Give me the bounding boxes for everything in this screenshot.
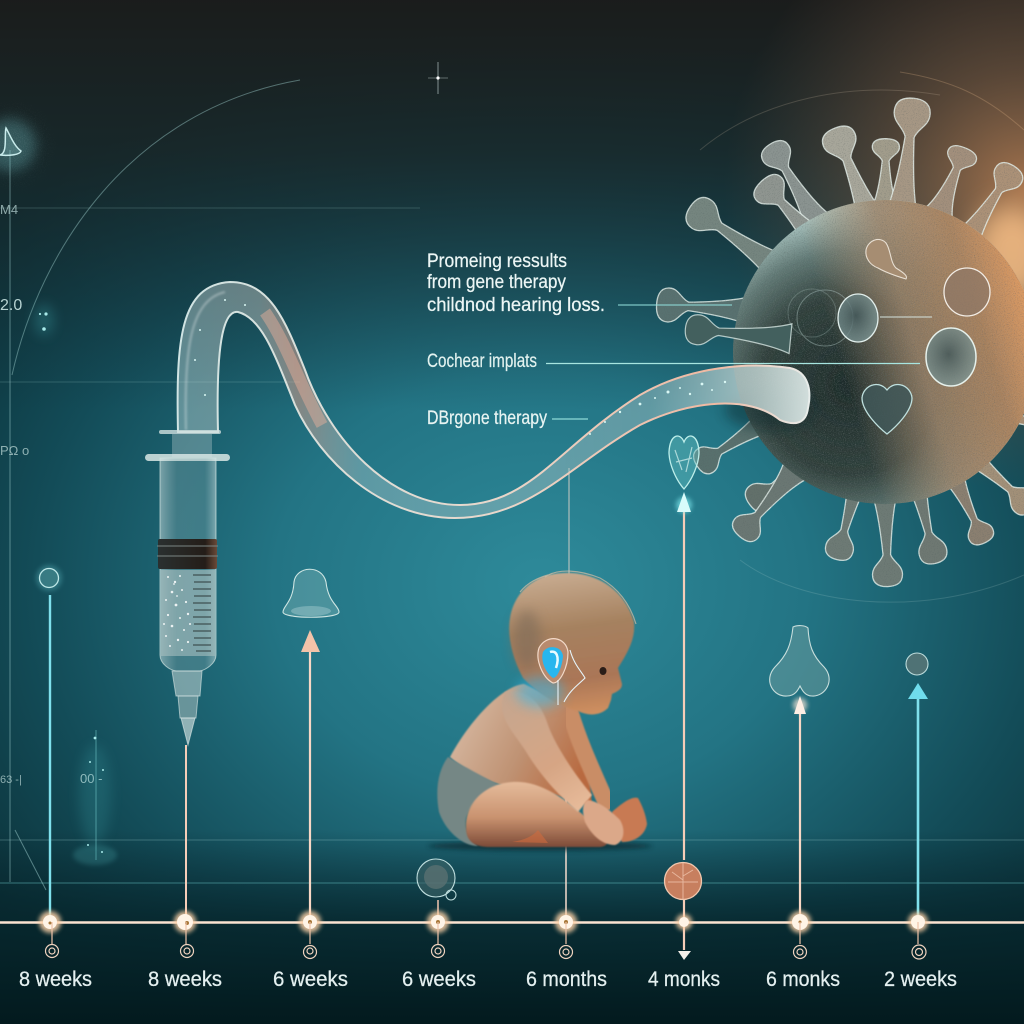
eye — [600, 667, 606, 675]
barrel — [160, 458, 216, 671]
icon: marker 8 ball — [906, 653, 928, 675]
left axis tick labels: PΩ o — [0, 443, 29, 458]
barrel flange — [145, 454, 230, 461]
timeline small icons below axis — [46, 922, 926, 959]
syringe — [145, 430, 230, 745]
delivery tube — [178, 282, 815, 518]
decorative glowing particles — [34, 304, 117, 865]
baby — [428, 571, 652, 851]
timeline labels: 6 weeks — [402, 968, 476, 991]
timeline labels: 8 weeks — [19, 968, 92, 991]
virus sphere body — [733, 200, 1024, 504]
left axis tick labels: 00 - — [80, 771, 102, 786]
neck implant glow — [516, 677, 564, 707]
icon: top left bell — [0, 110, 48, 179]
arrow: marker 6 down — [678, 951, 691, 960]
timeline labels: 6 months — [526, 968, 607, 991]
timeline labels: 2 weeks — [884, 968, 957, 991]
left axis tick labels: M4 — [0, 202, 18, 217]
near arm — [502, 691, 592, 812]
torso — [450, 684, 592, 806]
cell bubble 3 — [926, 328, 976, 386]
left axis tick labels — [0, 202, 102, 786]
timeline labels — [19, 968, 957, 991]
timeline labels: 6 monks — [766, 968, 840, 991]
title text: Promeing ressults — [427, 250, 567, 272]
nozzle — [172, 671, 202, 696]
icon: marker 1 circle — [36, 565, 62, 591]
ear heart cell icon — [669, 436, 699, 489]
timeline vertical marker lines — [50, 510, 918, 958]
spikes — [655, 96, 1024, 587]
timeline labels: 6 weeks — [273, 968, 348, 991]
liquid with particles — [161, 570, 215, 656]
plunger flange — [159, 430, 221, 434]
near leg — [466, 782, 607, 847]
timeline labels: 8 weeks — [148, 968, 222, 991]
arrow: marker 7 up — [793, 696, 807, 714]
far arm — [570, 712, 606, 802]
arrow: peach up — [301, 630, 320, 652]
diaper — [437, 757, 503, 846]
cell bubble 1 — [838, 294, 878, 342]
foot — [612, 798, 647, 842]
left axis tick labels: 2.0 — [0, 297, 22, 314]
icon: marker 6 red circle — [664, 862, 702, 900]
small bud on sphere — [866, 239, 907, 279]
orange under thigh — [512, 830, 548, 843]
timeline nodes — [39, 911, 928, 933]
glow behind virus — [972, 205, 1024, 305]
title text: from gene therapy — [427, 271, 566, 293]
ear with implant — [538, 639, 568, 683]
nerve lines — [558, 650, 585, 705]
label: cochlear implants: Cochear implats — [427, 351, 537, 372]
rubber stopper — [158, 539, 217, 569]
arrow: marker 6 up — [676, 492, 692, 513]
left axis tick labels: 63 -| — [0, 774, 22, 786]
thin line down to baby — [568, 468, 570, 575]
hair wisps — [520, 571, 636, 624]
arrow: cyan up — [908, 683, 928, 699]
shadow at back of head — [513, 610, 541, 670]
faint outline rings — [788, 289, 853, 346]
timeline horizontal axis — [0, 918, 1024, 926]
hand — [583, 800, 623, 845]
sparkle — [428, 62, 448, 94]
chart grid and axis lines — [0, 72, 1024, 890]
title text — [427, 250, 605, 316]
cell bubble 2 — [944, 268, 990, 316]
timeline labels: 4 monks — [648, 968, 720, 991]
icon: marker 3 dome — [283, 569, 339, 617]
graduations — [193, 575, 211, 651]
leader lines for text labels — [546, 305, 932, 419]
label: DB gene therapy: DBrgone therapy — [427, 407, 547, 429]
near spike on sphere — [684, 314, 792, 354]
icon: marker 4 cell — [417, 859, 456, 900]
virus with spikes — [655, 96, 1024, 587]
title text: childnod hearing loss. — [427, 294, 605, 316]
head — [509, 573, 634, 714]
icon: marker 7 nose shape — [770, 626, 829, 696]
heart shaped bubble — [862, 385, 912, 434]
tube sparkles — [194, 299, 726, 435]
floor shadow — [428, 841, 652, 851]
